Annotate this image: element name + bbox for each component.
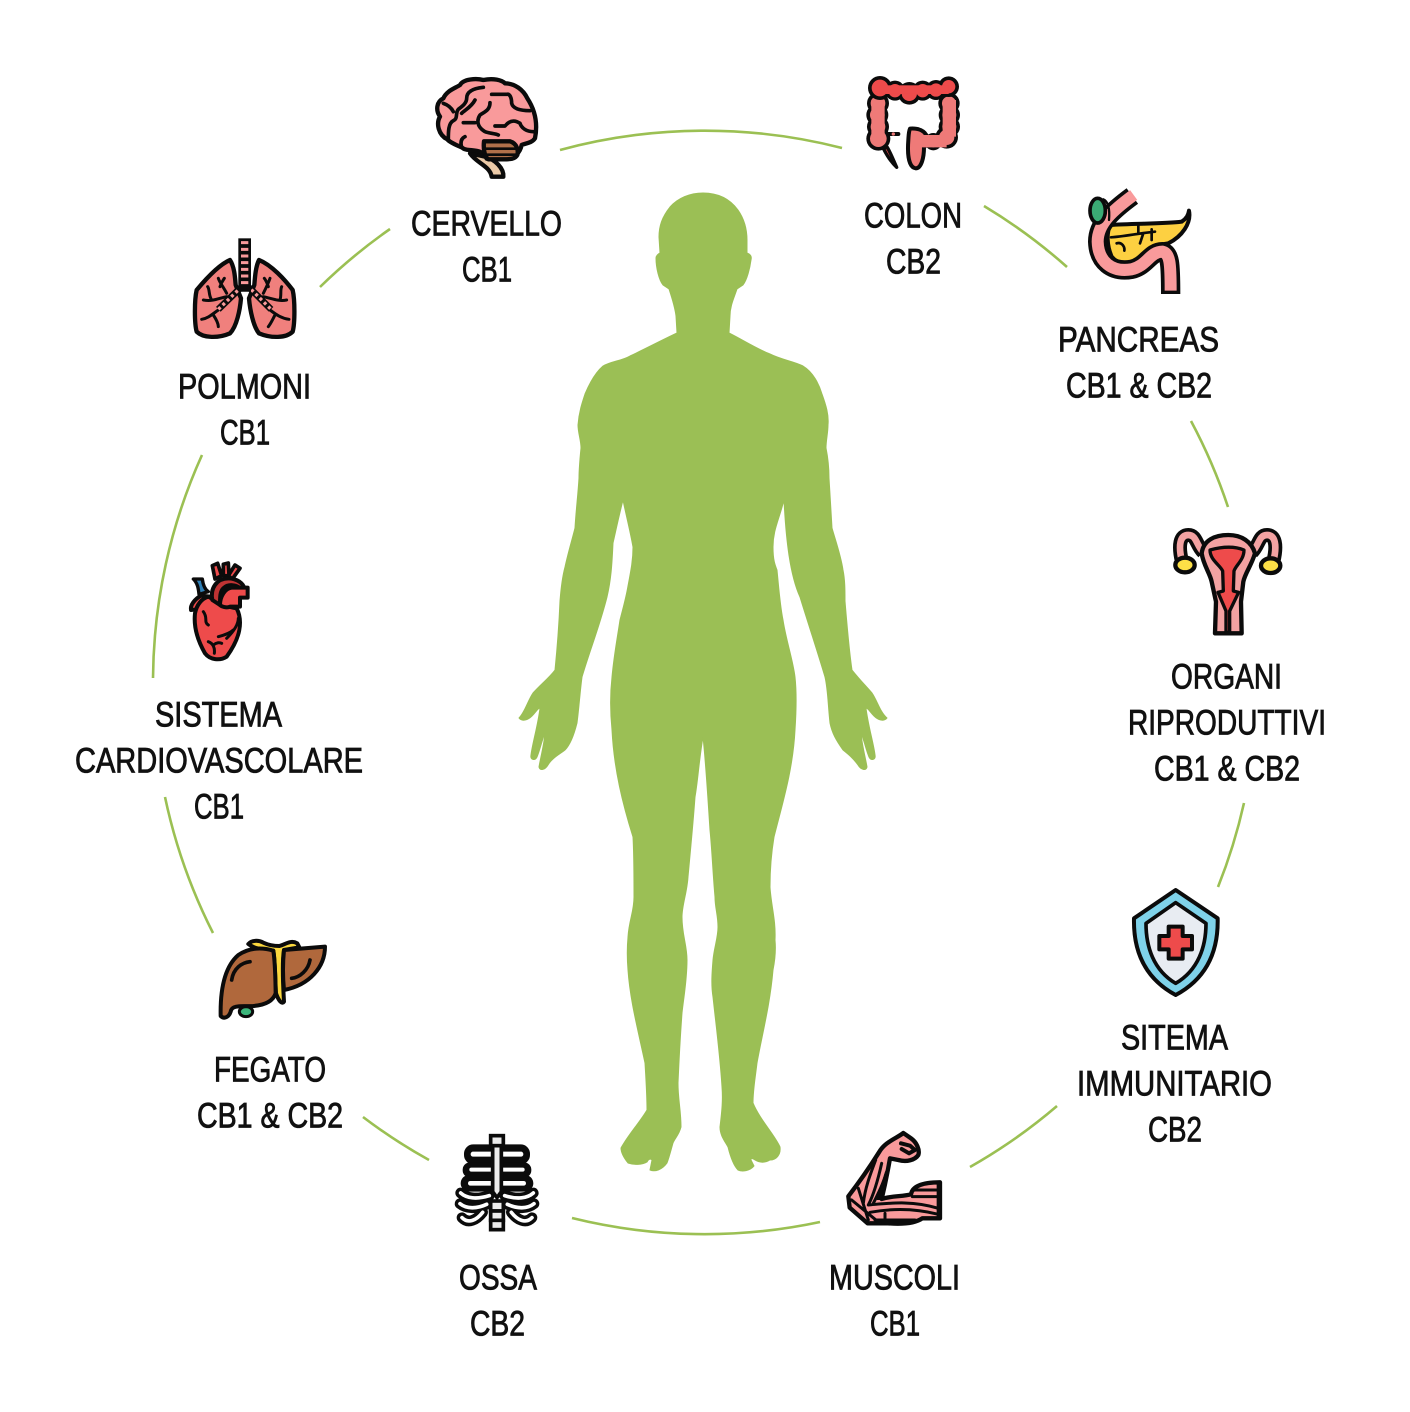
icon: rib cage xyxy=(460,1136,534,1230)
label: cervello CB1 xyxy=(411,204,562,290)
human body silhouette xyxy=(519,193,887,1171)
label: muscoli CB1: CB1 xyxy=(870,1304,920,1344)
label: organi riproduttivi CB1 & CB2: RIPRODUTTIVI xyxy=(1128,704,1326,742)
panel: fegato xyxy=(197,941,343,1136)
label: sistema cardiovascolare CB1 xyxy=(75,696,363,826)
icon: lungs xyxy=(195,238,294,337)
panel: organi riproduttivi xyxy=(1128,515,1326,788)
label: ossa CB2: CB2 xyxy=(470,1304,525,1344)
label: fegato CB1 & CB2 xyxy=(197,1050,343,1136)
label: fegato CB1 & CB2: FEGATO xyxy=(214,1050,326,1090)
panel: pancreas xyxy=(1058,195,1219,406)
label: cervello CB1: CERVELLO xyxy=(411,204,562,244)
panel: ossa xyxy=(459,1136,538,1344)
panel: sistema immunitario xyxy=(1077,890,1272,1150)
ring of green connecting arcs xyxy=(153,131,1244,1234)
label: muscoli CB1 xyxy=(829,1258,960,1344)
icon: reproductive organs xyxy=(1160,515,1280,633)
label: muscoli CB1: MUSCOLI xyxy=(829,1258,960,1298)
label: organi riproduttivi CB1 & CB2: CB1 & CB2 xyxy=(1154,750,1300,788)
label: organi riproduttivi CB1 & CB2 xyxy=(1128,658,1326,788)
panel: sistema cardiovascolare xyxy=(75,563,363,826)
label: ossa CB2: OSSA xyxy=(459,1258,538,1298)
label: organi riproduttivi CB1 & CB2: ORGANI xyxy=(1171,658,1282,696)
label: fegato CB1 & CB2: CB1 & CB2 xyxy=(197,1096,343,1136)
label: pancreas CB1 & CB2 xyxy=(1058,320,1219,406)
label: sitema immunitario CB2: IMMUNITARIO xyxy=(1077,1064,1272,1104)
label: sitema immunitario CB2 xyxy=(1077,1018,1272,1150)
label: sitema immunitario CB2: CB2 xyxy=(1148,1110,1202,1150)
panel: cervello xyxy=(411,79,562,290)
label: sitema immunitario CB2: SITEMA xyxy=(1121,1018,1229,1058)
icon: pancreas xyxy=(1090,195,1189,294)
icon: brain xyxy=(437,79,536,177)
panel: colon xyxy=(864,76,962,282)
label: sistema cardiovascolare CB1: SISTEMA xyxy=(155,696,283,734)
label: colon CB2: CB2 xyxy=(886,242,941,282)
icon: liver xyxy=(221,941,325,1018)
label: ossa CB2 xyxy=(459,1258,538,1344)
label: colon CB2: COLON xyxy=(864,196,962,236)
label: colon CB2 xyxy=(864,196,962,282)
icon: shield with cross xyxy=(1134,890,1218,995)
label: polmoni CB1 xyxy=(178,368,311,452)
icon: anatomical heart xyxy=(191,563,248,659)
label: polmoni CB1: POLMONI xyxy=(178,368,311,406)
label: pancreas CB1 & CB2: PANCREAS xyxy=(1058,320,1219,360)
label: pancreas CB1 & CB2: CB1 & CB2 xyxy=(1066,366,1212,406)
label: sistema cardiovascolare CB1: CARDIOVASCOLARE xyxy=(75,742,363,780)
icon: flexed arm muscle xyxy=(848,1133,941,1224)
label: sistema cardiovascolare CB1: CB1 xyxy=(194,788,244,826)
label: polmoni CB1: CB1 xyxy=(220,414,270,452)
panel: muscoli xyxy=(829,1133,960,1344)
label: cervello CB1: CB1 xyxy=(462,250,512,290)
icon: colon xyxy=(866,76,960,168)
panel: polmoni xyxy=(178,238,311,452)
